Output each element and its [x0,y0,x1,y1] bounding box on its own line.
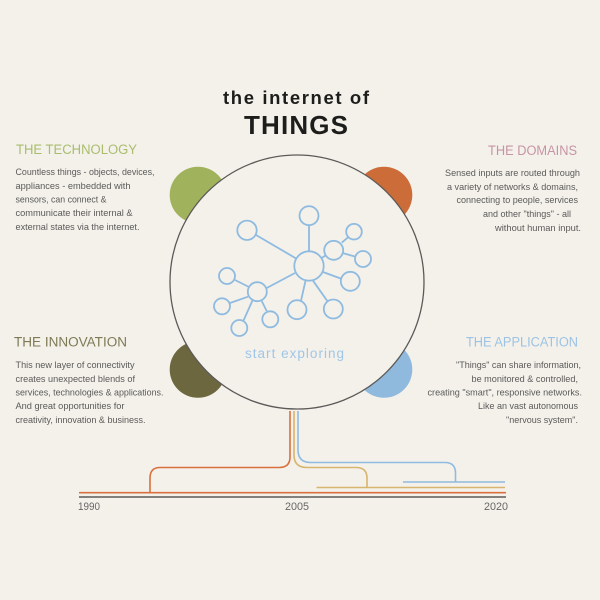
icon: orange circle [356,167,412,223]
start exploring label: start exploring [245,346,344,361]
title: THINGS [244,110,348,140]
text block: the innovation: services, technologies & applications. [16,386,164,398]
title: the internet of [223,87,370,108]
panel: the innovation [14,334,164,425]
heading: the innovation: THE INNOVATION [14,334,127,350]
text block: the innovation: creativity, innovation & business. [16,414,146,425]
tan branch [294,411,367,488]
panel: the application [428,334,582,425]
heading: the domains: THE DOMAINS [488,143,577,159]
tan bar [316,486,505,488]
blue bar [403,481,505,483]
icon: green circle [170,167,226,223]
text block: the application: "nervous system". [506,414,578,425]
network diagram [214,206,371,336]
blue branch [298,411,456,482]
year labels: 1990 [78,501,100,513]
heading: the technology: THE TECHNOLOGY [16,142,137,158]
text block: the technology: sensors, can connect & [16,194,107,204]
text block: the technology: communicate their internal & [16,207,133,218]
panel: the domains [445,143,581,233]
text block: the domains: connecting to people, services [456,194,578,205]
text block: the innovation: creates unexpected blends of [16,373,135,384]
icon: blue circle [356,341,412,398]
orange bar [79,492,506,494]
text block: the domains: without human input. [494,222,581,233]
text block: the technology: external states via the internet. [16,221,140,232]
main circle [170,155,424,409]
text block: the application: creating "smart", responsive networks. [428,386,582,398]
text block: the domains: Sensed inputs are routed through [445,167,580,178]
text block: the application [428,359,582,425]
year labels: 2020 [484,501,508,513]
text block: the application: "Things" can share information, [456,359,581,370]
panel: the technology [16,142,154,232]
text block: the application: be monitored & controlled, [472,373,578,384]
text block: the application: Like an vast autonomous [478,400,578,411]
text block: the technology: appliances - embedded with [16,180,130,191]
text block: the innovation: And great opportunities for [16,400,124,411]
year labels [78,501,508,513]
orange branch [150,411,290,492]
text block: the domains: a variety of networks & domains, [447,181,578,192]
text block: the domains [445,167,581,233]
axis line [79,496,506,498]
heading: the application: THE APPLICATION [466,334,578,350]
text block: the innovation: This new layer of connectivity [16,359,135,370]
icon: olive circle [170,341,226,398]
title [223,87,370,140]
text block: the innovation [16,359,164,425]
year labels: 2005 [285,501,309,513]
timeline [79,411,506,497]
text block: the technology [16,166,154,232]
text block: the domains: and other "things" - all [483,208,571,219]
text block: the technology: Countless things - objects, devices, [16,166,154,177]
